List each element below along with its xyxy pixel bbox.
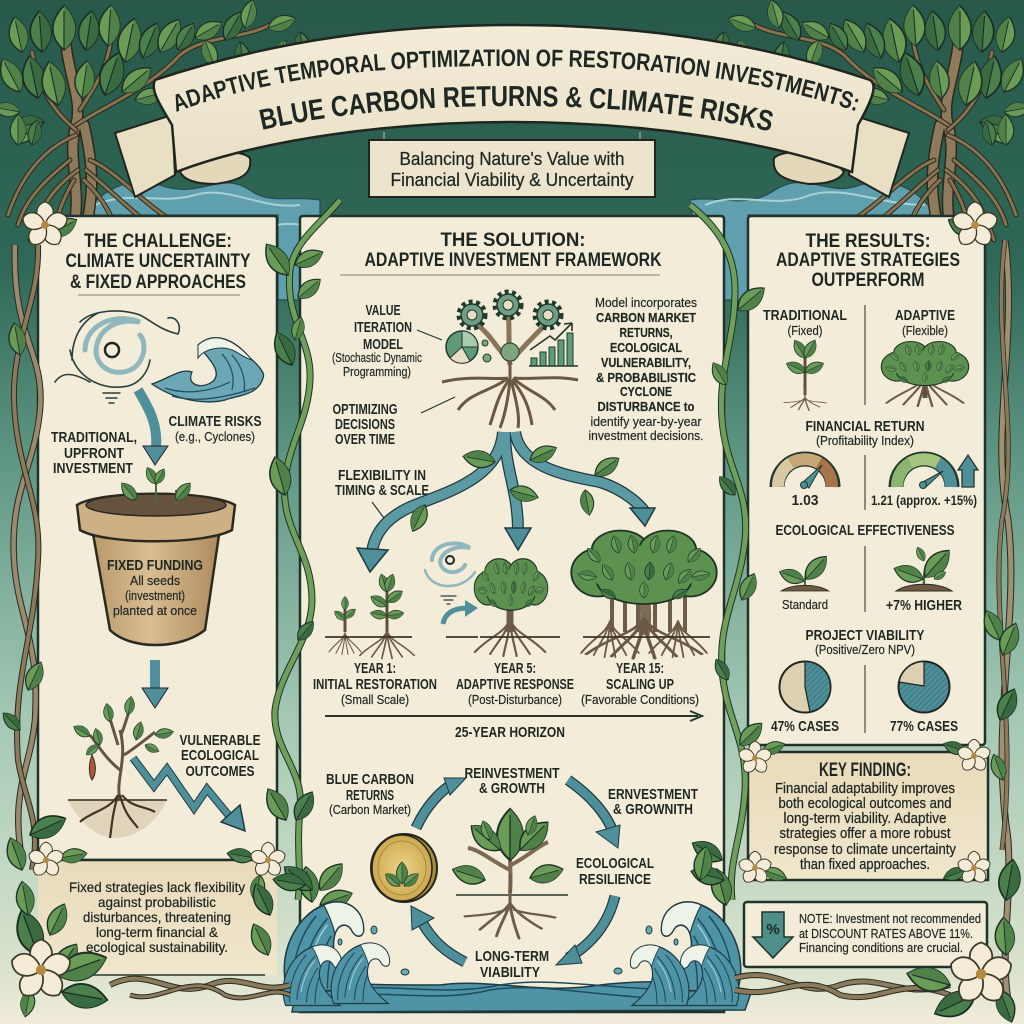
year 15 label: SCALING UP — [606, 676, 674, 693]
icon: fixed funding pot: planted at once — [113, 603, 197, 618]
project viability label: (Positive/Zero NPV) — [815, 642, 915, 657]
climate risks label: (e.g., Cyclones) — [175, 429, 255, 444]
arrow: returns to reinvestment — [416, 778, 466, 828]
traditional label: UPFRONT — [64, 445, 124, 462]
project viability label — [806, 627, 924, 657]
icon: standard sprout — [777, 551, 832, 591]
pie: 77 percent — [898, 662, 950, 712]
value 1.03: 1.03 — [792, 492, 818, 509]
panel: discount rate note: Financing conditions are crucial. — [799, 940, 963, 955]
model description: investment decisions. — [588, 428, 704, 443]
resilience label: ECOLOGICAL — [576, 855, 654, 872]
reinvestment label: & GROWTH — [479, 780, 545, 797]
icon: fixed funding pot — [77, 465, 235, 645]
flower: top left — [20, 202, 70, 249]
panel: key finding: Financial adaptability improves — [775, 780, 955, 797]
icon: fixed funding pot: (investment) — [125, 588, 185, 603]
panel: discount rate note: at DISCOUNT RATES ABOVE 11%. — [799, 926, 973, 941]
icon: ocean wave — [152, 338, 264, 402]
panel: key finding: strategies offer a more robust — [780, 825, 951, 842]
optimizing label: OVER TIME — [335, 431, 395, 448]
panel: fixed strategies callout: ecological sustainability. — [86, 939, 228, 955]
financial return label: (Profitability Index) — [816, 433, 914, 448]
value iteration label: (Stochastic Dynamic — [332, 350, 422, 365]
model description: & PROBABILISTIC — [596, 370, 697, 385]
flower: bottom left large — [9, 940, 73, 1001]
icon: percent down arrow — [753, 912, 793, 958]
flower: key finding top left — [737, 741, 773, 775]
optimizing label: OPTIMIZING — [332, 401, 398, 418]
pie label left: 47% CASES — [771, 718, 839, 735]
optimizing label — [332, 401, 398, 448]
year 1 label: INITIAL RESTORATION — [313, 676, 437, 693]
model description: CYCLONE — [620, 384, 672, 399]
value iteration label: MODEL — [363, 336, 403, 353]
model description: VULNERABILITY, — [601, 355, 691, 370]
year 1 label: (Small Scale) — [341, 692, 409, 707]
flower: callout top left — [27, 842, 65, 878]
icon: fixed funding pot: FIXED FUNDING — [107, 557, 203, 574]
challenge heading: & FIXED APPROACHES — [70, 272, 246, 293]
icon: cyclone — [55, 311, 179, 403]
year 15 label: YEAR 15: — [616, 660, 664, 677]
climate risks label — [168, 413, 262, 444]
year 5 tree — [446, 559, 560, 656]
flower: bottom right large — [948, 942, 1014, 1006]
vine: left of solution panel — [259, 200, 355, 913]
arrow: reinvestment to resilience — [568, 780, 620, 848]
value iteration label — [332, 302, 422, 379]
panel: fixed strategies callout — [38, 860, 277, 975]
duplicated reinvestment label — [608, 786, 698, 818]
viability label: VIABILITY — [480, 964, 540, 981]
vine: right of solution panel — [688, 205, 770, 907]
higher label: +7% HIGHER — [886, 597, 962, 614]
title line 2: BLUE CARBON RETURNS & CLIMATE RISKS — [259, 86, 773, 130]
flower: key finding bottom right — [956, 851, 992, 885]
gauge: traditional — [777, 459, 833, 488]
gauge: adaptive — [896, 459, 952, 488]
adaptive column label — [895, 307, 955, 338]
resilience label — [576, 855, 654, 888]
panel: fixed strategies callout: against probabilistic — [98, 894, 216, 910]
year 5 label: (Post-Disturbance) — [468, 692, 562, 707]
timeline arrow — [325, 711, 702, 721]
model description: identify year-by-year — [590, 414, 702, 429]
vulnerable label: ECOLOGICAL — [181, 747, 259, 764]
financial return label — [806, 418, 924, 448]
climate risks label: CLIMATE RISKS — [168, 413, 262, 430]
icon: percent down arrow: % — [766, 921, 780, 938]
panel: key finding: response to climate uncertainty — [774, 841, 956, 858]
decorative leaves on streams — [406, 441, 623, 534]
results heading: ADAPTIVE STRATEGIES — [776, 250, 960, 271]
ecological effectiveness label: ECOLOGICAL EFFECTIVENESS — [776, 522, 954, 539]
blue carbon label: RETURNS — [346, 787, 394, 804]
year 15 label: (Favorable Conditions) — [581, 692, 699, 707]
subtitle plaque — [369, 132, 655, 197]
icon: cyclone small — [425, 543, 475, 604]
standard label: Standard — [782, 597, 828, 612]
subtitle plaque: Financial Viability & Uncertainty — [390, 170, 634, 190]
model description: Model incorporates — [595, 295, 697, 310]
traditional label — [51, 429, 137, 477]
left corner mangrove tree — [0, 0, 312, 245]
results heading: THE RESULTS: — [806, 231, 930, 252]
dividers — [864, 305, 866, 733]
panel: key finding — [748, 752, 988, 880]
year 1 saplings — [325, 573, 414, 658]
vulnerable label: OUTCOMES — [186, 763, 254, 780]
icon: vulnerable tree — [68, 696, 174, 838]
flexibility label: TIMING & SCALE — [335, 482, 429, 499]
challenge heading: CLIMATE UNCERTAINTY — [66, 251, 251, 272]
title banner — [114, 24, 910, 198]
value iteration label: VALUE — [366, 302, 400, 319]
traditional column label: (Fixed) — [788, 323, 822, 338]
right corner mangrove tree — [712, 0, 1024, 245]
water behind banner, left — [85, 182, 320, 300]
adaptive column label: ADAPTIVE — [895, 307, 955, 324]
frame leaves around panels — [46, 213, 979, 959]
icon: higher sprout — [892, 544, 956, 591]
traditional column label: TRADITIONAL — [763, 307, 847, 324]
arrow: risks to pot — [138, 390, 168, 465]
panel: key finding: long-term viability. Adaptive — [784, 810, 946, 827]
duplicated reinvestment label: ERNVESTMENT — [608, 786, 698, 803]
arrow: adaptive response — [443, 600, 478, 624]
panel: key finding: than fixed approaches. — [800, 856, 930, 873]
challenge heading: THE CHALLENGE: — [84, 231, 232, 252]
traditional label: INVESTMENT — [53, 460, 133, 477]
blue carbon label: BLUE CARBON — [326, 771, 414, 788]
panel: results — [748, 216, 985, 745]
duplicated reinvestment label: & GROWNITH — [613, 801, 693, 818]
results heading — [776, 231, 960, 291]
panel: challenge — [38, 216, 277, 860]
bottom right vines — [735, 917, 1020, 1024]
value iteration label: Programming) — [343, 364, 411, 379]
arrow: up — [958, 455, 978, 487]
challenge heading — [66, 231, 251, 295]
icon: central cycle tree — [450, 809, 568, 938]
arrow: viability to returns — [411, 906, 465, 962]
model description: RETURNS, — [620, 325, 672, 340]
year 1 label — [313, 660, 437, 707]
flower: callout top right — [249, 842, 287, 878]
year 1 label: YEAR 1: — [354, 660, 396, 677]
vine: right edge — [979, 240, 1024, 1000]
bottom waves — [283, 902, 752, 1012]
year 5 label: YEAR 5: — [494, 660, 536, 677]
icon: traditional sapling — [784, 338, 826, 411]
reinvestment label: REINVESTMENT — [464, 765, 560, 782]
model description: CARBON MARKET — [596, 310, 696, 325]
flower: key finding bottom left — [737, 851, 773, 885]
reinvestment label — [464, 765, 560, 797]
value 1.21: 1.21 (approx. +15%) — [871, 493, 977, 508]
arrow: pot to outcome — [142, 660, 168, 708]
vulnerable label — [180, 732, 260, 780]
model description: ECOLOGICAL — [610, 340, 682, 355]
year 15 mangrove — [571, 530, 717, 658]
horizon label: 25-YEAR HORIZON — [455, 724, 565, 741]
panel: key finding: KEY FINDING: — [819, 760, 911, 781]
optimizing label: DECISIONS — [335, 416, 395, 433]
pie: 47 percent — [780, 662, 830, 712]
vine: left edge — [0, 245, 84, 980]
year 15 label — [581, 660, 699, 707]
bottom left vines — [18, 945, 290, 1018]
icon: decision tree with gears — [417, 292, 578, 428]
pie label right: 77% CASES — [890, 718, 958, 735]
panel: solution — [300, 216, 724, 1012]
arrows: branching investment streams — [357, 432, 655, 572]
arrow: resilience to viability — [556, 896, 615, 965]
model description: DISTURBANCE to — [598, 399, 695, 414]
flower: key finding top right — [956, 739, 992, 773]
subtitle plaque: Balancing Nature's Value with — [400, 149, 624, 169]
value iteration label: ITERATION — [354, 319, 412, 336]
viability label: LONG-TERM — [475, 948, 549, 965]
solution heading — [340, 230, 662, 275]
project viability label: PROJECT VIABILITY — [806, 627, 924, 644]
adaptive column label: (Flexible) — [902, 323, 948, 338]
model description — [588, 295, 704, 443]
arrow: declining zigzag — [133, 758, 245, 831]
year 5 label: ADAPTIVE RESPONSE — [456, 676, 574, 693]
water behind banner, right — [690, 182, 935, 300]
blue carbon label — [326, 771, 414, 817]
panel: discount rate note — [744, 902, 987, 967]
results heading: OUTPERFORM — [812, 270, 924, 291]
flexibility label: FLEXIBILITY IN — [338, 467, 426, 484]
icon: adaptive mangrove — [881, 342, 969, 406]
blue carbon label: (Carbon Market) — [329, 802, 411, 817]
viability label — [475, 948, 549, 981]
resilience label: RESILIENCE — [579, 871, 651, 888]
title line 1: ADAPTIVE TEMPORAL OPTIMIZATION OF RESTORATION INVESTMENTS: — [176, 49, 858, 112]
flexibility label — [335, 467, 429, 518]
icon: fixed funding pot: All seeds — [130, 573, 180, 588]
solution heading: THE SOLUTION: — [440, 230, 586, 251]
panel: key finding: both ecological outcomes and — [778, 795, 952, 812]
year 5 label — [456, 660, 574, 707]
traditional column label — [763, 307, 847, 338]
flower: top right — [950, 202, 1000, 249]
financial return label: FINANCIAL RETURN — [806, 418, 924, 435]
panel: fixed strategies callout: disturbances, threatening — [83, 909, 231, 925]
icon: carbon coin — [371, 834, 437, 902]
traditional label: TRADITIONAL, — [51, 429, 137, 446]
panel: fixed strategies callout: long-term financial & — [96, 924, 219, 940]
panel: fixed strategies callout: Fixed strategies lack flexibility — [69, 879, 245, 895]
vulnerable label: VULNERABLE — [180, 732, 260, 749]
panel: discount rate note: NOTE: Investment not recommended — [799, 911, 981, 926]
solution heading: ADAPTIVE INVESTMENT FRAMEWORK — [364, 250, 662, 271]
